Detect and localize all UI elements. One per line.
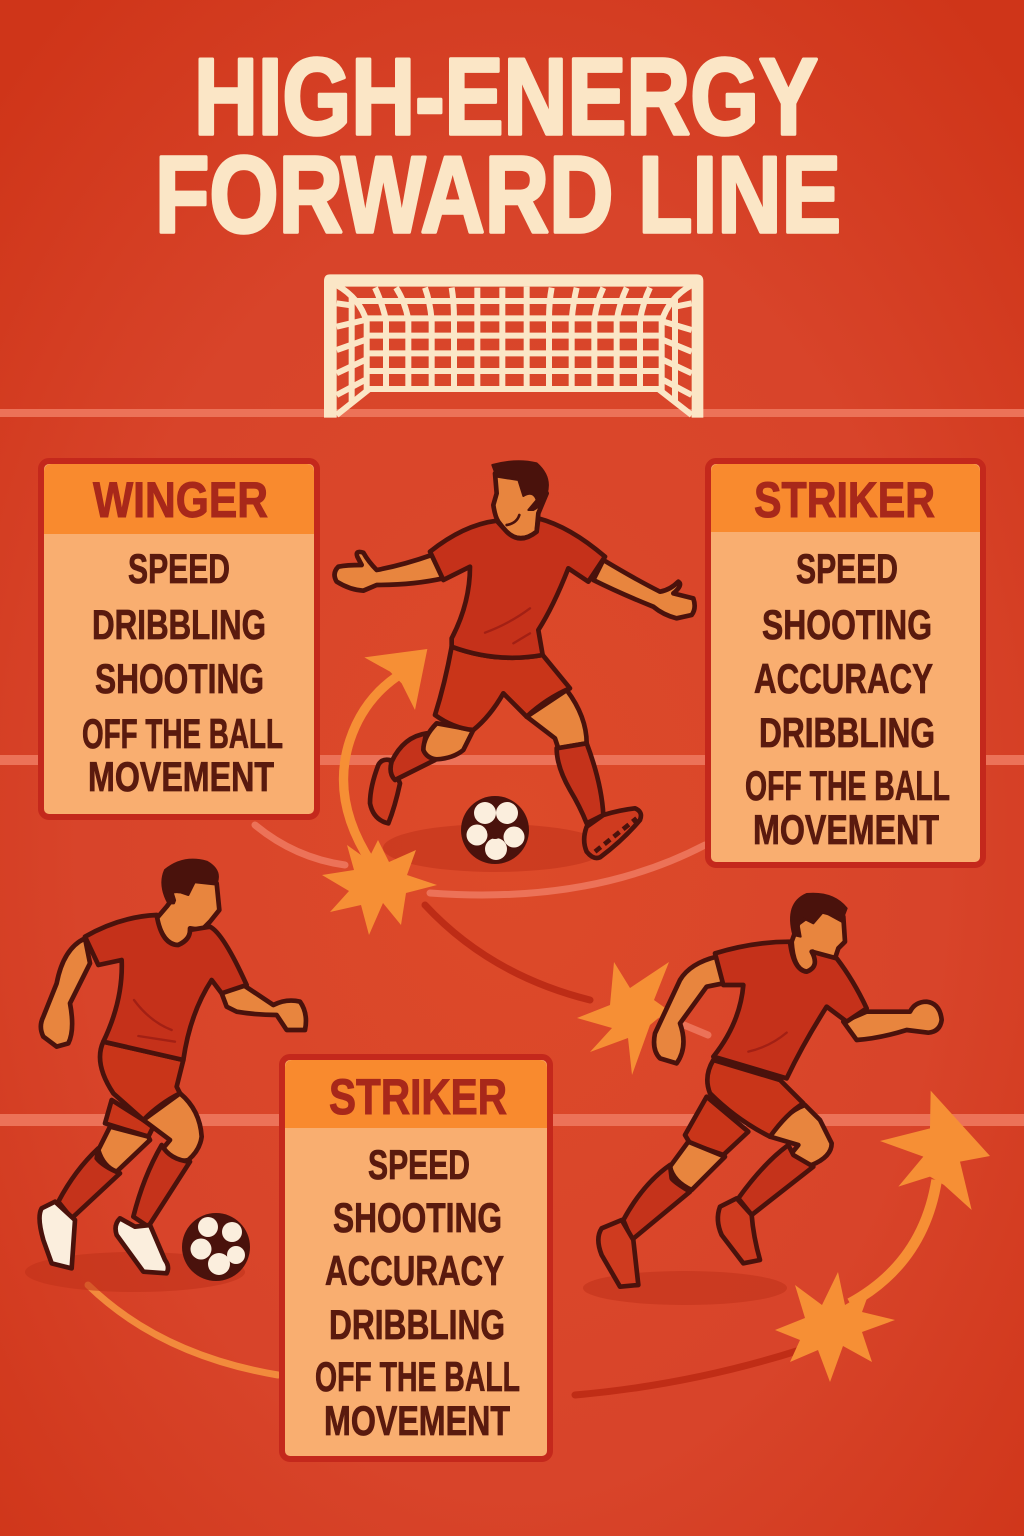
attribute list (82, 545, 283, 800)
front sock (557, 743, 603, 823)
back boot (598, 1220, 638, 1287)
front thigh (770, 1105, 832, 1165)
shirt (85, 915, 247, 1060)
front boot (584, 808, 641, 858)
back thigh (98, 1127, 150, 1172)
shorts (435, 647, 570, 730)
smile (507, 515, 519, 525)
heading: STRIKER (329, 1069, 507, 1125)
icon: ball centre (461, 796, 529, 864)
player: left dribbler (40, 860, 306, 1273)
front boot (718, 1198, 760, 1263)
attribute list: DRIBBLING (759, 709, 935, 756)
heading: STRIKER (754, 472, 935, 528)
back thigh (670, 1142, 725, 1190)
shorts (707, 1060, 803, 1137)
attribute list: OFF THE BALL (315, 1353, 520, 1400)
front boot (116, 1218, 168, 1273)
pitch lines (0, 409, 1024, 1126)
front thigh (143, 1093, 202, 1161)
icon: burst left (322, 840, 437, 935)
attribute list: ACCURACY (325, 1247, 504, 1294)
back sock (623, 1165, 690, 1240)
rear thigh (423, 723, 473, 759)
front sock (133, 1145, 190, 1227)
player shadows (25, 824, 787, 1305)
icon: ball left (182, 1213, 250, 1281)
title (155, 36, 841, 256)
rear boot (370, 760, 400, 823)
arrow: right curved arrow (850, 1091, 990, 1303)
heading: WINGER (93, 472, 268, 528)
icon: burst lower right (775, 1272, 895, 1382)
icon: goal with net (324, 274, 703, 418)
shirt wrinkles (485, 608, 530, 643)
attribute list: SPEED (368, 1141, 470, 1188)
front arm (843, 1002, 942, 1040)
attribute list: OFF THE BALL (82, 710, 283, 757)
front arm (222, 985, 306, 1030)
back shorts leg (685, 1097, 748, 1155)
attribute list: SHOOTING (95, 655, 264, 702)
attribute list: ACCURACY (754, 655, 933, 702)
rear sock (391, 733, 435, 780)
front thigh (527, 690, 587, 748)
right arm (593, 560, 695, 618)
shirt (713, 942, 867, 1078)
card frame (708, 461, 983, 865)
hair (162, 860, 218, 903)
hair (791, 894, 847, 937)
back sock (58, 1148, 120, 1218)
attribute list: DRIBBLING (92, 601, 266, 648)
attribute list (745, 545, 950, 853)
panel: striker bottom (282, 1057, 550, 1459)
ear (174, 893, 186, 911)
back arm (654, 957, 723, 1063)
boot studs (595, 818, 637, 852)
shirt (430, 518, 605, 658)
card header (285, 1060, 547, 1128)
pitch arcs (88, 825, 800, 1395)
neck and face (157, 880, 219, 945)
left arm (335, 552, 443, 591)
player: centre kicker (335, 461, 695, 858)
card frame (41, 461, 317, 817)
attribute list (315, 1141, 520, 1444)
back shorts leg (105, 1100, 153, 1137)
title: FORWARD LINE (155, 134, 841, 256)
back arm (41, 938, 90, 1047)
neck and face (792, 910, 845, 972)
attribute list: SHOOTING (333, 1194, 502, 1241)
player: right runner (598, 894, 942, 1287)
card header (711, 464, 980, 532)
front sock (738, 1145, 813, 1215)
shirt wrinkle (748, 1033, 787, 1052)
attribute list: SHOOTING (762, 601, 932, 648)
title: HIGH-ENERGY (194, 36, 818, 158)
attribute list: DRIBBLING (329, 1301, 505, 1348)
panel: winger (41, 461, 317, 817)
back boot (40, 1202, 75, 1268)
hair (492, 461, 548, 510)
card frame (282, 1057, 550, 1459)
attribute list: MOVEMENT (324, 1397, 510, 1444)
attribute list: MOVEMENT (753, 806, 939, 853)
shorts (100, 1042, 183, 1120)
arrow: centre curved arrow (344, 649, 427, 863)
shirt wrinkles (134, 1000, 175, 1042)
card header (44, 464, 314, 534)
attribute list: MOVEMENT (88, 753, 274, 800)
icon: burst centre (577, 962, 669, 1075)
attribute list: SPEED (796, 545, 898, 592)
panel: striker right (708, 461, 983, 865)
attribute list: SPEED (128, 545, 230, 592)
neck and face (493, 470, 547, 538)
